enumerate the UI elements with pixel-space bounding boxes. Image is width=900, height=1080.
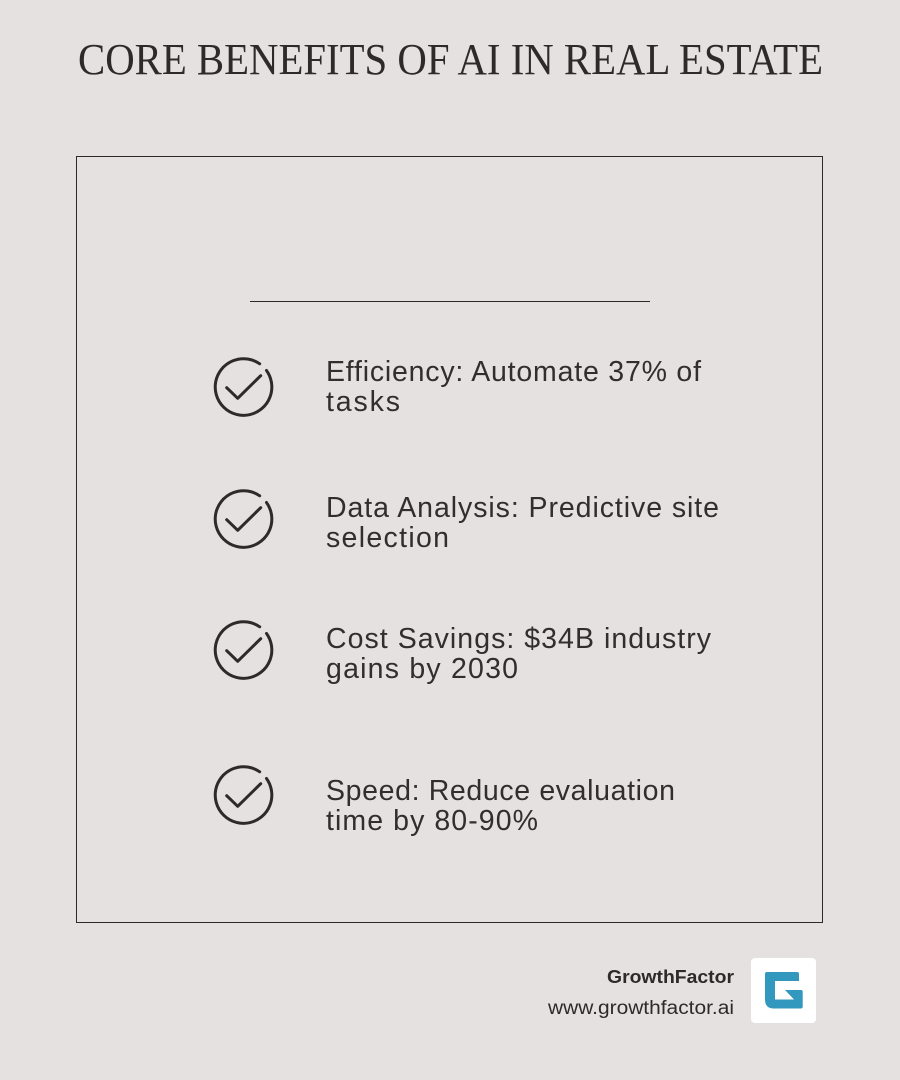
text: efficiency: Efficiency: Automate 37% of — [326, 356, 701, 388]
benefit: speed — [215, 767, 675, 837]
text: data analysis: Data Analysis: Predictive site — [326, 492, 719, 524]
text: cost savings: gains by 2030 — [326, 653, 518, 685]
footer: brand — [547, 958, 816, 1023]
text: data analysis — [326, 492, 719, 554]
text: speed: Speed: Reduce evaluation — [326, 775, 675, 807]
text: efficiency: tasks — [326, 386, 400, 418]
text: speed — [326, 775, 675, 837]
panel: benefits frame — [76, 156, 822, 922]
text: cost savings: Cost Savings: $34B industry — [326, 623, 712, 655]
website: www.growthfactor.ai — [547, 998, 734, 1019]
icon: logo — [751, 958, 816, 1023]
benefit: cost savings — [215, 622, 712, 685]
icon: check circle — [215, 622, 272, 678]
text: efficiency — [326, 356, 701, 418]
icon: check circle — [215, 491, 272, 547]
text: data analysis: selection — [326, 522, 449, 554]
brand name: GrowthFactor — [607, 967, 734, 987]
text: speed: time by 80-90% — [326, 805, 538, 837]
icon: check circle — [215, 359, 272, 415]
title: CORE BENEFITS OF AI IN REAL ESTATE — [78, 35, 823, 84]
benefit: data analysis — [215, 491, 719, 554]
text: cost savings — [326, 623, 712, 685]
benefit: efficiency — [215, 356, 701, 418]
icon: check circle — [215, 767, 272, 823]
